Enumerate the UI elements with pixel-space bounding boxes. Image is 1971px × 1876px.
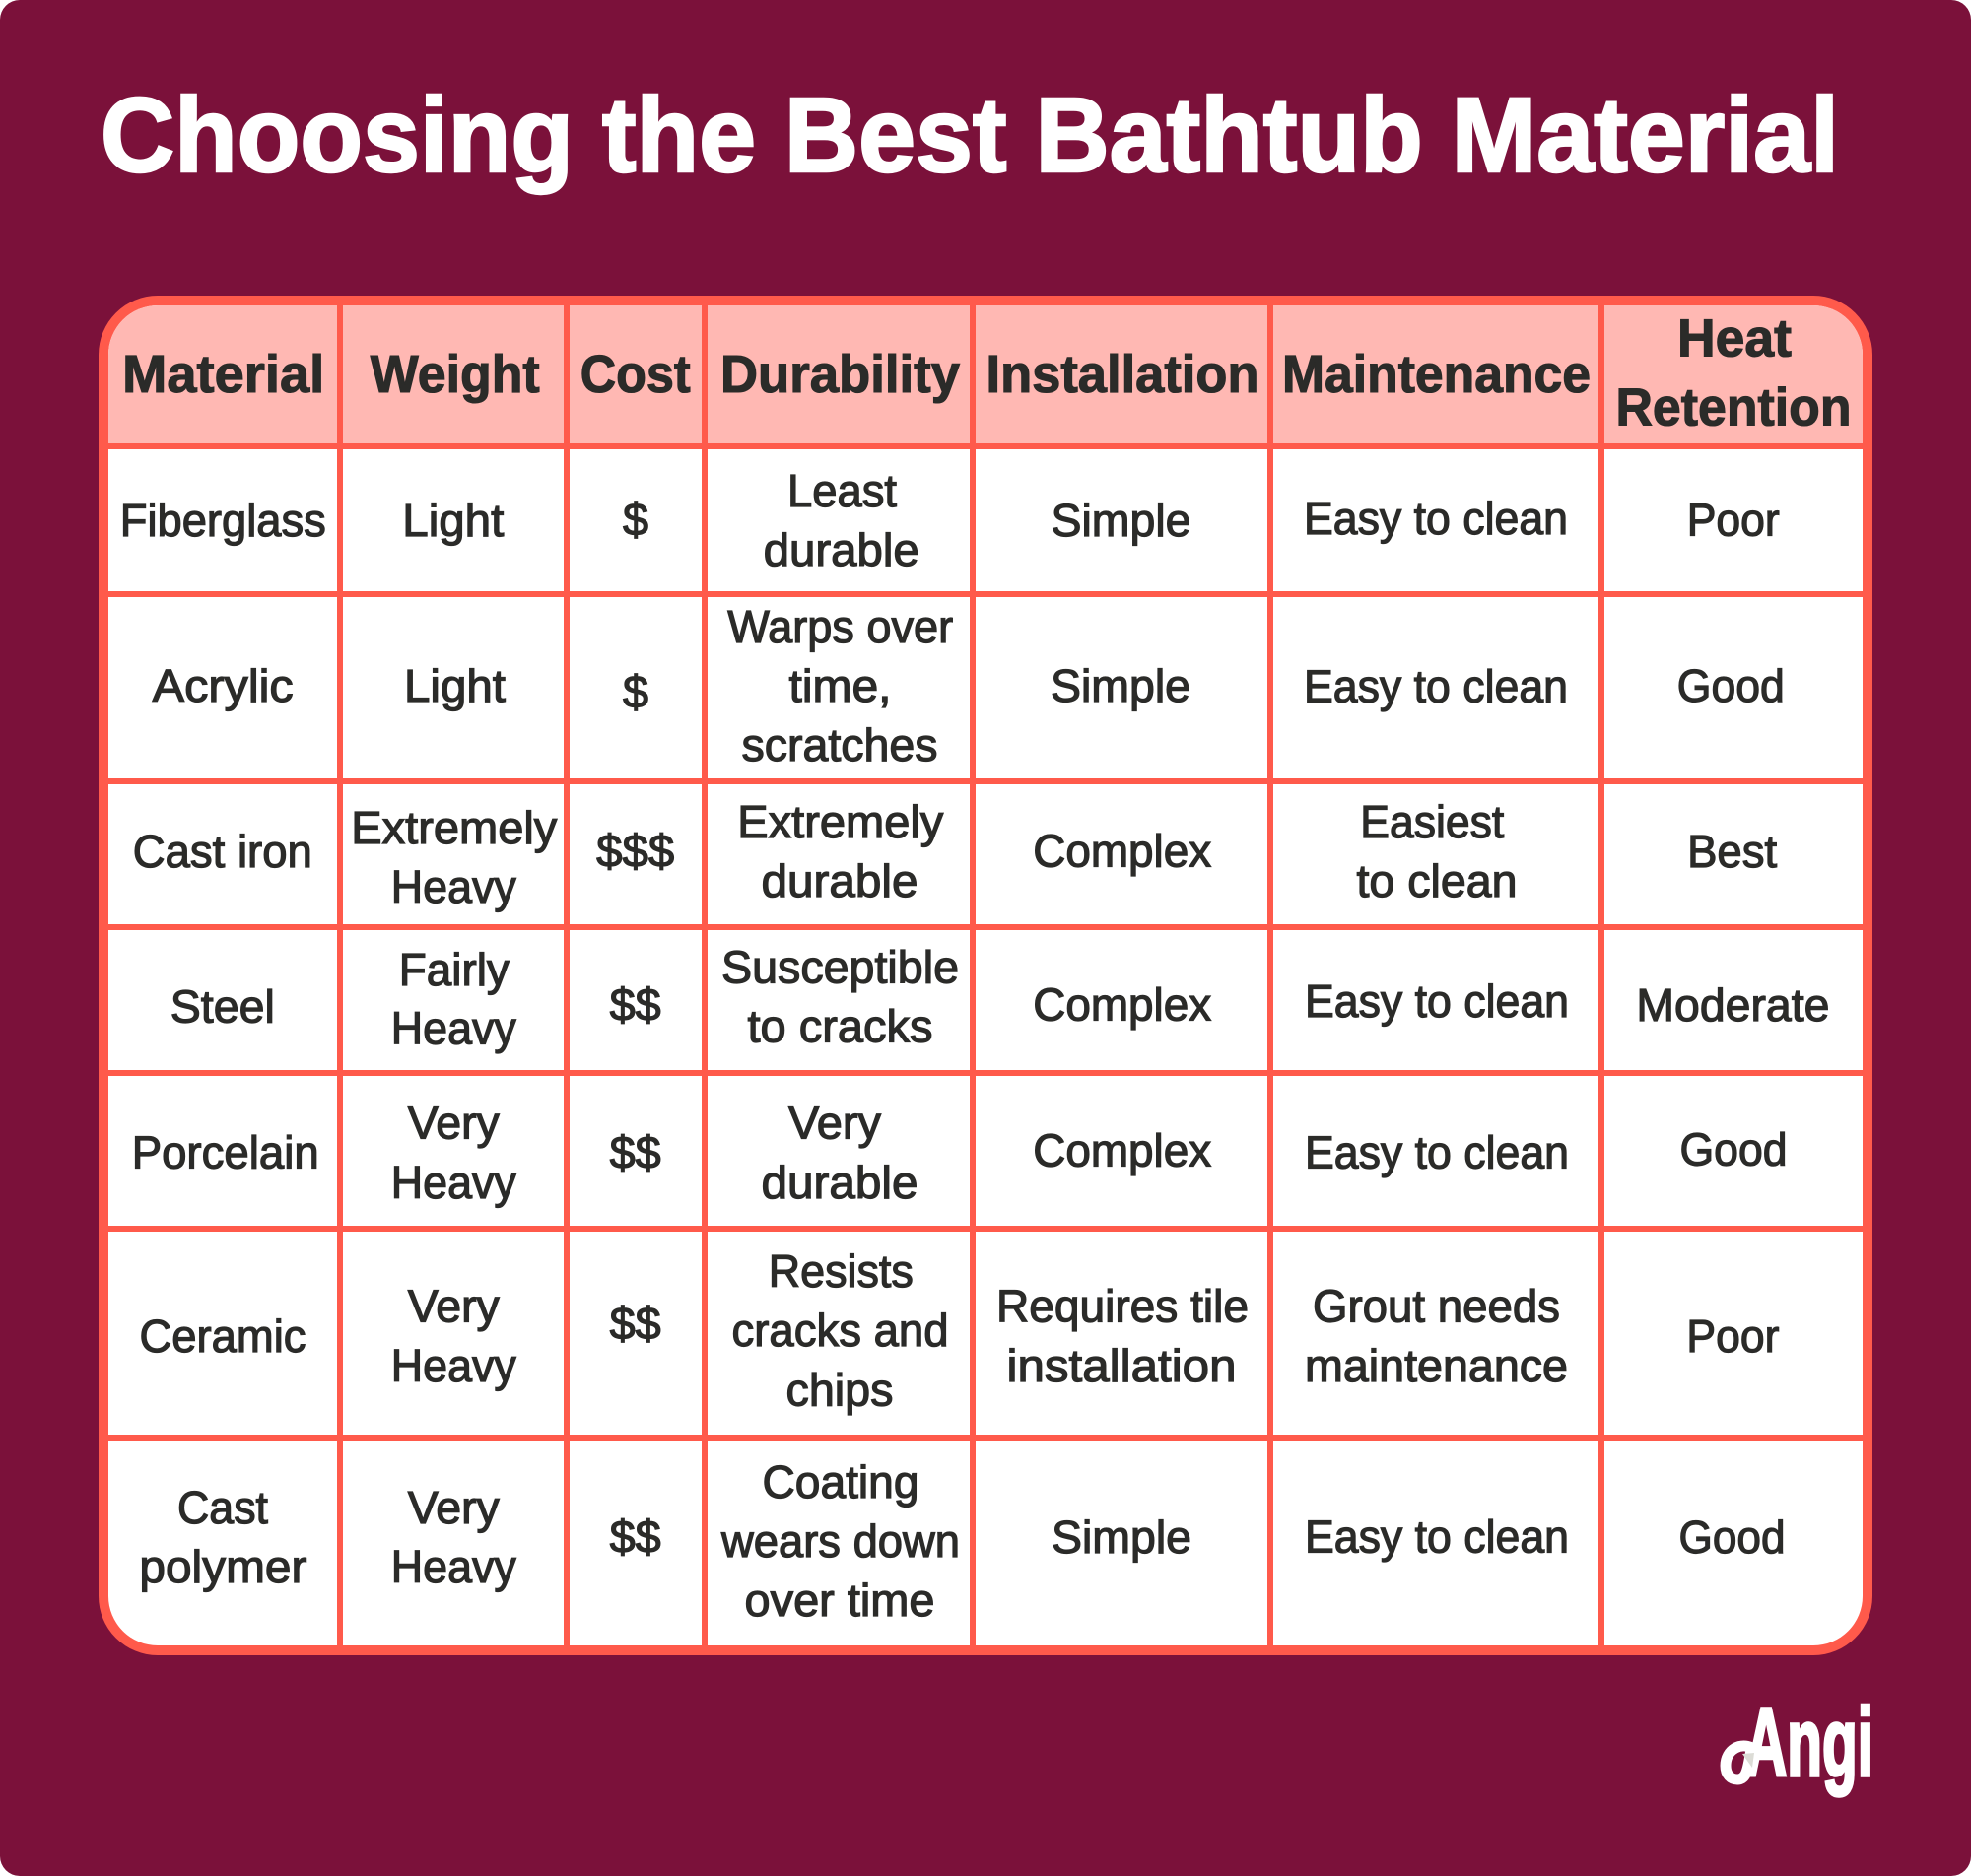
row: Fiberglass: Easy to clean	[1304, 493, 1568, 544]
header: Cost: Cost	[580, 345, 691, 404]
table body background	[108, 305, 1863, 1645]
row: Porcelain: Heavy	[391, 1157, 516, 1208]
row: Fiberglass: Poor	[1687, 495, 1780, 546]
row: Acrylic: scratches	[741, 719, 938, 770]
row: Steel: $$	[610, 979, 661, 1031]
row: Cast polymer: Good	[1679, 1511, 1786, 1563]
row: Cast iron: Easiest	[1360, 796, 1505, 847]
row: Fiberglass	[120, 465, 1780, 575]
row: Steel: Fairly	[399, 944, 510, 995]
row: Acrylic: Simple	[1051, 660, 1190, 711]
header: Durability: Durability	[720, 345, 960, 404]
row: Ceramic: maintenance	[1305, 1340, 1568, 1391]
row: Cast polymer: Cast	[177, 1482, 268, 1533]
row: Acrylic: $	[623, 666, 648, 717]
row: Acrylic	[153, 601, 1785, 770]
row: Steel: Easy to clean	[1305, 975, 1569, 1027]
row: Porcelain: $$	[610, 1127, 661, 1178]
row: Steel: Moderate	[1636, 979, 1829, 1031]
row: Porcelain: Very	[408, 1098, 500, 1149]
row: Porcelain: Porcelain	[132, 1127, 319, 1178]
row: Cast polymer: over time	[745, 1574, 934, 1626]
header: Heat Retention	[1616, 309, 1851, 437]
header: Heat Retention: Retention	[1616, 378, 1851, 437]
row: Ceramic: Ceramic	[140, 1310, 306, 1362]
row: Cast polymer: $$	[610, 1511, 661, 1563]
row: Acrylic: Easy to clean	[1304, 660, 1568, 711]
row: Porcelain: Complex	[1033, 1125, 1211, 1176]
row: Ceramic: $$	[610, 1298, 661, 1349]
row: Cast iron: Extremely	[737, 796, 943, 847]
row: Cast polymer: Simple	[1052, 1511, 1191, 1563]
header: Maintenance: Maintenance	[1282, 345, 1591, 404]
row: Cast polymer: Very	[408, 1482, 500, 1533]
header: Installation: Installation	[986, 345, 1259, 404]
logo: Angi: Angi	[1745, 1688, 1873, 1796]
row: Cast iron: Heavy	[391, 861, 516, 912]
row: Cast iron: to clean	[1356, 855, 1518, 906]
title: Choosing the Best Bathtub Material	[101, 75, 1839, 194]
header row	[122, 309, 1852, 437]
row: Ceramic: Poor	[1686, 1310, 1779, 1362]
row: Fiberglass: durable	[764, 524, 919, 575]
row: Steel: Susceptible	[721, 941, 959, 992]
row: Cast iron: Extremely	[351, 802, 557, 853]
row: Ceramic: Heavy	[391, 1340, 516, 1391]
header: Heat Retention: Heat	[1677, 309, 1792, 368]
row: Ceramic: cracks and	[731, 1305, 948, 1356]
row: Acrylic: Acrylic	[153, 660, 294, 711]
row: Cast iron: Best	[1687, 826, 1777, 877]
header: Weight: Weight	[371, 345, 540, 404]
row: Porcelain: Good	[1679, 1123, 1788, 1174]
row: Cast polymer: Heavy	[391, 1541, 516, 1592]
row: Fiberglass: Fiberglass	[120, 495, 326, 546]
header: Material: Material	[122, 345, 324, 404]
row: Acrylic: Warps over	[727, 601, 953, 652]
row: Ceramic: Resists	[769, 1245, 914, 1297]
row: Ceramic: Very	[408, 1281, 500, 1332]
row: Cast polymer: polymer	[139, 1541, 306, 1592]
logo: Angi	[1726, 1688, 1873, 1796]
row: Steel	[170, 941, 1829, 1054]
row: Porcelain: Easy to clean	[1305, 1127, 1569, 1178]
table frame	[99, 296, 1872, 1655]
logo fold accent	[1742, 1753, 1754, 1768]
row: Acrylic: time,	[788, 660, 891, 711]
row: Cast polymer: Easy to clean	[1305, 1511, 1569, 1563]
row: Cast polymer: Coating	[763, 1456, 918, 1508]
row: Fiberglass: $	[623, 494, 648, 545]
row: Porcelain: durable	[761, 1157, 918, 1208]
row: Acrylic: Good	[1677, 660, 1785, 711]
row: Ceramic: Grout needs	[1313, 1281, 1560, 1332]
row: Porcelain	[132, 1098, 1788, 1208]
comparison table	[99, 296, 1872, 1655]
row: Fiberglass: Simple	[1051, 495, 1190, 546]
row: Cast iron	[133, 796, 1777, 912]
row: Steel: Steel	[170, 980, 275, 1032]
row: Acrylic: Light	[404, 660, 506, 711]
row: Cast polymer: wears down	[720, 1515, 960, 1567]
header row background	[108, 305, 1863, 443]
row: Cast iron: durable	[761, 855, 918, 906]
row: Ceramic: installation	[1007, 1340, 1236, 1391]
row: Ceramic: chips	[786, 1364, 893, 1415]
row: Steel: Heavy	[391, 1003, 516, 1054]
row: Cast iron: Cast iron	[133, 826, 312, 877]
row: Steel: to cracks	[747, 1000, 932, 1051]
row: Steel: Complex	[1033, 979, 1211, 1031]
row: Fiberglass: Light	[402, 495, 505, 546]
row: Ceramic	[140, 1245, 1779, 1415]
logo loop swirl	[1726, 1744, 1754, 1779]
row: Porcelain: Very	[788, 1098, 881, 1149]
row: Cast iron: Complex	[1033, 826, 1211, 877]
row: Fiberglass: Least	[787, 465, 897, 516]
row: Cast polymer	[139, 1456, 1785, 1626]
row: Ceramic: Requires tile	[996, 1281, 1249, 1332]
row: Cast iron: $$$	[596, 826, 674, 877]
